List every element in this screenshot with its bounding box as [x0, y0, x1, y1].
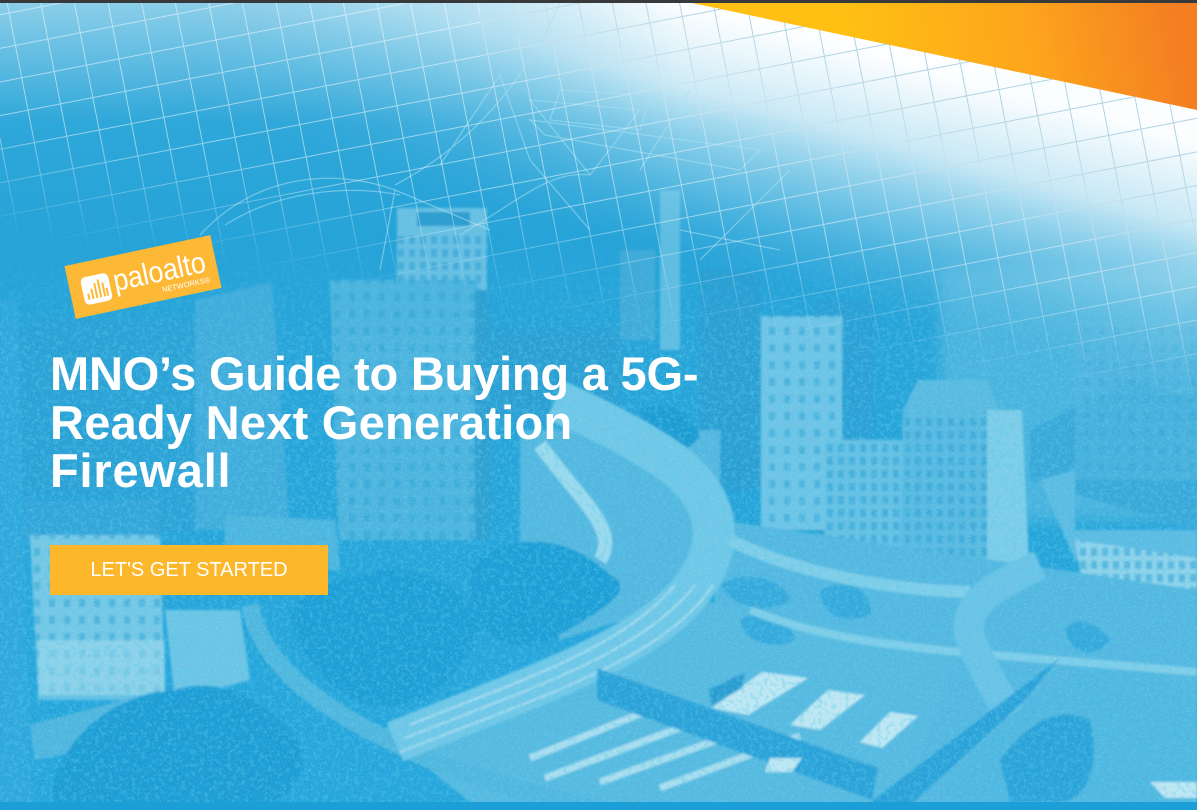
bottom blue strip: [0, 802, 1197, 810]
perspective grid on white area: [480, 3, 1197, 287]
title: [50, 347, 698, 497]
button: let's get started: LET'S GET STARTED: [90, 559, 288, 581]
flyover: [250, 605, 600, 810]
highway curve: [395, 400, 714, 742]
bus terminal strips: [530, 712, 800, 788]
crossings: [765, 758, 1197, 798]
trees: [290, 569, 480, 706]
logo icon: [80, 272, 113, 306]
bus: [708, 672, 745, 705]
top dark bar: [0, 0, 1197, 3]
title: MNO’s Guide to Buying a 5G-: [50, 347, 698, 400]
logo badge: [65, 235, 221, 319]
right towers: [700, 270, 760, 490]
perspective grid: [0, 0, 1197, 430]
street ground right: [700, 520, 1197, 810]
low ground left: [165, 610, 250, 700]
plaza and road deck: [380, 600, 960, 810]
title: Ready Next Generation: [50, 396, 572, 448]
far towers: [397, 208, 487, 320]
blueprint arcs: [200, 3, 790, 270]
photographic speckle texture: [0, 230, 1197, 802]
city scene: [0, 190, 1197, 810]
title: Firewall: [50, 444, 231, 497]
white wash from upper right: [266, 3, 1197, 369]
logo wordmark: paloalto: [110, 246, 209, 298]
side roads: [730, 540, 970, 592]
top pale band: [0, 3, 1197, 123]
ramp: [969, 565, 1040, 715]
distant skyline haze: [0, 270, 1197, 520]
button: let's get started: [50, 545, 328, 595]
logo subtext: NETWORKS®: [161, 275, 211, 294]
pedestrian bridge: [597, 668, 878, 800]
orange corner banner: [692, 3, 1197, 110]
left building: [25, 500, 160, 540]
diagonal bridge: [860, 658, 1060, 810]
